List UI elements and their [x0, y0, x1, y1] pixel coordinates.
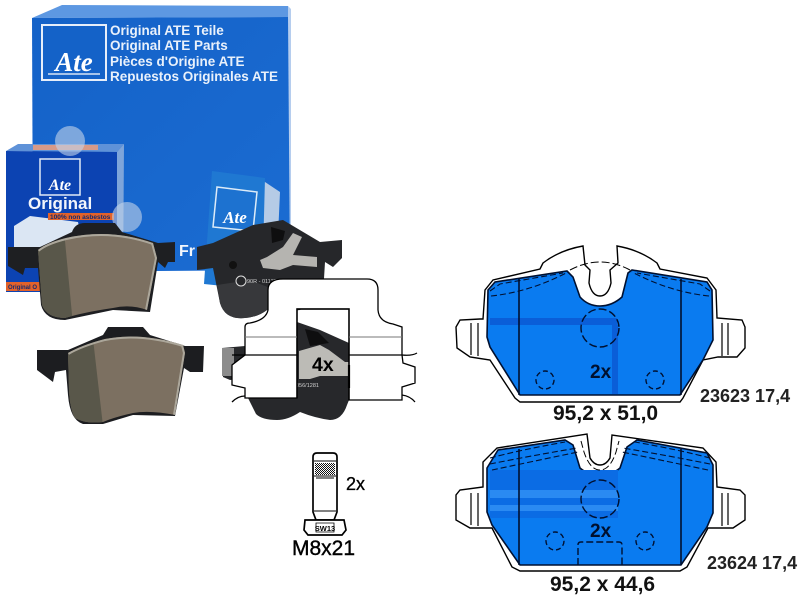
box multilingual title: Original ATE Teile — [110, 23, 224, 38]
outline — [456, 246, 745, 402]
small blue ATE box: Ate — [48, 177, 71, 194]
brake pad: backing plate top right — [197, 220, 342, 318]
bolt quantity: 2x — [346, 474, 365, 494]
small blue ATE box: Original — [28, 194, 92, 213]
ATE logo square: Ate — [53, 47, 93, 77]
brake pad: backing plate top right: 90R - 01135 — [247, 279, 277, 285]
technical drawing: pad 23623 — [456, 246, 745, 402]
dimensions 23624: 95,2 x 44,6 — [550, 573, 655, 596]
dimensions 23623: 95,2 x 51,0 — [553, 402, 658, 425]
box multilingual title: Pièces d'Origine ATE — [110, 54, 244, 69]
quantity: 2x — [590, 521, 612, 542]
outline — [456, 434, 745, 571]
brake pad: front top left — [8, 220, 175, 325]
small blue ATE box: Original O — [8, 285, 37, 291]
bolt wrench size: SW13 — [315, 524, 335, 533]
anti-rattle clip outline with 4x — [232, 279, 417, 402]
ATE logo square — [42, 25, 106, 80]
box multilingual title — [110, 23, 278, 84]
small blue ATE box: 100% non asbestos — [50, 214, 111, 221]
part number 23624: 23624 17,4 — [707, 553, 797, 573]
brake pad: backing plate bottom right: 056/1281 — [296, 383, 319, 389]
brake pad: front bottom left — [37, 327, 204, 426]
part number 23623: 23623 17,4 — [700, 386, 790, 406]
watermark badges — [55, 126, 142, 232]
clip quantity: 4x — [312, 354, 334, 376]
box multilingual title: Original ATE Parts — [110, 38, 228, 53]
technical drawing: pad 23624 — [456, 434, 745, 571]
small blue ATE box — [6, 144, 124, 292]
small leaflet — [204, 171, 280, 290]
box multilingual title: Repuestos Originales ATE — [110, 69, 278, 84]
small leaflet: Ate — [222, 208, 247, 227]
quantity: 2x — [590, 362, 612, 383]
bolt size label: M8x21 — [292, 537, 355, 560]
large blue ATE box — [32, 5, 291, 272]
brake pad: backing plate bottom right — [222, 322, 349, 420]
guide bolt M8x21 — [304, 453, 346, 535]
box side text: Fr — [179, 243, 195, 260]
